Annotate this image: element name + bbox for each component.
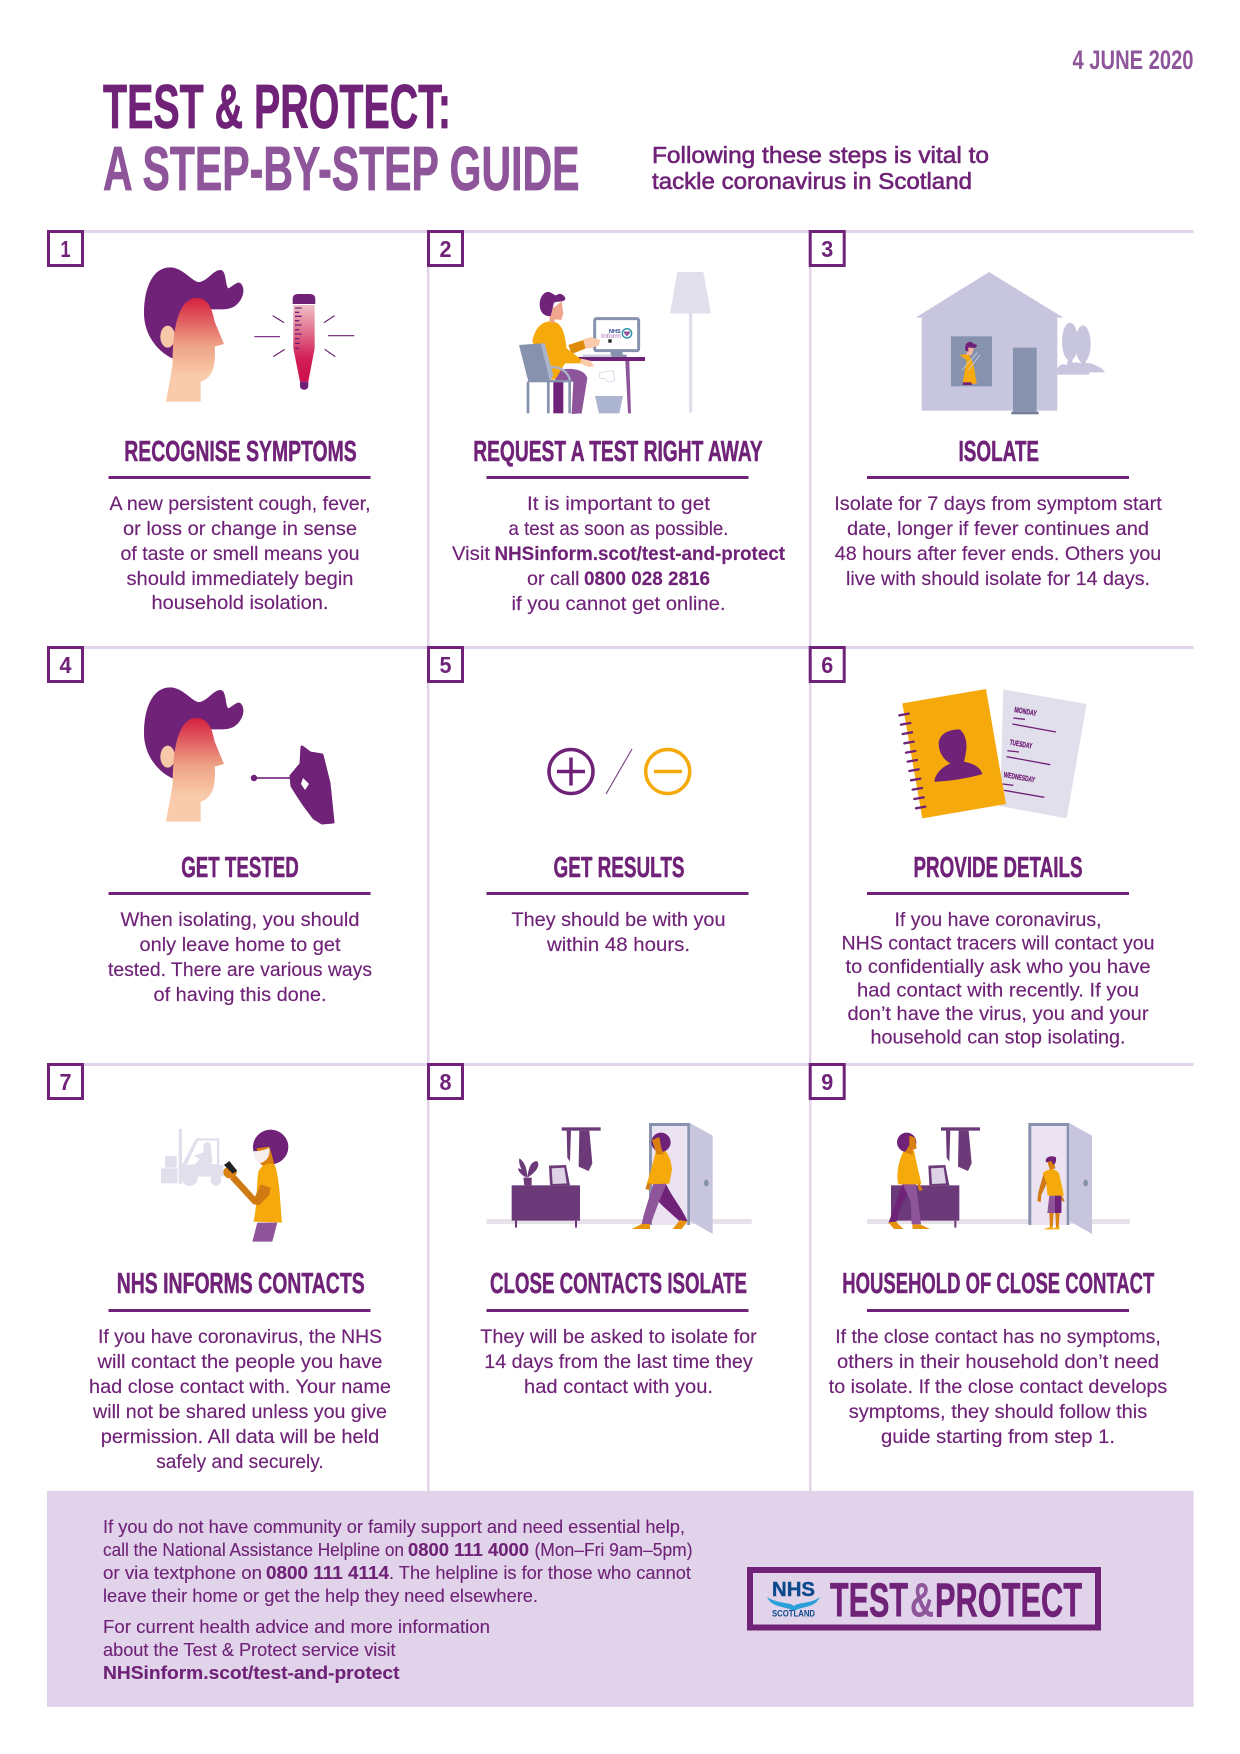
body text: if you cannot get online. bbox=[512, 593, 726, 615]
body text: had contact with recently. If you bbox=[857, 980, 1139, 1002]
panel: step 2 request a test bbox=[428, 232, 785, 615]
icon: household member and child at door bbox=[867, 1123, 1130, 1234]
body text: others in their household don’t need bbox=[837, 1351, 1159, 1373]
body text: symptoms, they should follow this bbox=[849, 1401, 1148, 1423]
panel: step 7 NHS informs contacts bbox=[48, 1064, 391, 1473]
body text: to isolate. If the close contact develops bbox=[829, 1376, 1167, 1398]
logo: NHS Scotland Test & Protect: TEST bbox=[830, 1574, 908, 1628]
body text: 14 days from the last time they bbox=[484, 1351, 753, 1373]
logo: NHS Scotland Test & Protect bbox=[750, 1570, 1098, 1628]
icon: person at computer with lamp: Inform bbox=[601, 333, 621, 340]
body text: only leave home to get bbox=[140, 934, 341, 956]
heading: NHS INFORMS CONTACTS bbox=[117, 1268, 365, 1300]
body text bbox=[829, 1326, 1167, 1448]
body text: Isolate for 7 days from symptom start bbox=[834, 493, 1162, 515]
number badge 2: 2 bbox=[440, 236, 452, 262]
icon: notebook and diary page: TUESDAY bbox=[1009, 738, 1033, 751]
further information text: NHSinform.scot/test-and-protect bbox=[103, 1663, 400, 1683]
body text: They will be asked to isolate for bbox=[480, 1326, 757, 1348]
heading: PROVIDE DETAILS bbox=[914, 852, 1082, 884]
icon: head with thermometer bbox=[144, 267, 354, 402]
heading: GET TESTED bbox=[181, 852, 299, 884]
number badge 3 bbox=[810, 232, 844, 266]
body text: will contact the people you have bbox=[96, 1351, 383, 1373]
body text: of having this done. bbox=[154, 984, 326, 1006]
number badge 5: 5 bbox=[440, 652, 452, 678]
icon: notebook and diary page bbox=[899, 689, 1087, 818]
helpline text bbox=[103, 1517, 692, 1606]
body text: If you have coronavirus, the NHS bbox=[98, 1326, 382, 1348]
body text: A new persistent cough, fever, bbox=[110, 493, 370, 515]
body text: should immediately begin bbox=[126, 568, 354, 590]
number badge 9: 9 bbox=[821, 1069, 833, 1095]
body text: 0800 028 2816 bbox=[584, 568, 710, 590]
body text bbox=[110, 493, 370, 614]
panel: step 1 recognise symptoms bbox=[48, 232, 370, 614]
number badge 7 bbox=[48, 1064, 82, 1098]
icon: person at computer with lamp bbox=[519, 272, 711, 414]
body text: They should be with you bbox=[512, 909, 726, 931]
body text bbox=[842, 909, 1154, 1048]
date: 4 JUNE 2020 bbox=[1072, 45, 1194, 75]
body text: of taste or smell means you bbox=[120, 543, 360, 565]
helpline text: . The helpline is for those who cannot bbox=[389, 1563, 691, 1583]
icon: contact tracer with phone and forklift bbox=[161, 1129, 288, 1242]
body text: NHS contact tracers will contact you bbox=[842, 932, 1154, 954]
number badge 6: 6 bbox=[821, 652, 833, 678]
icon: house with person at window bbox=[916, 272, 1105, 414]
logo: NHS Scotland Test & Protect: & bbox=[910, 1574, 934, 1628]
panel: step 3 isolate bbox=[810, 232, 1162, 590]
body text: household isolation. bbox=[152, 592, 328, 614]
body text: 48 hours after fever ends. Others you bbox=[835, 543, 1161, 565]
subtitle: tackle coronavirus in Scotland bbox=[652, 168, 972, 194]
body text: or loss or change in sense bbox=[123, 518, 357, 540]
number badge 1: 1 bbox=[60, 236, 71, 262]
icon: head and hand with swab bbox=[144, 687, 333, 823]
further information text: For current health advice and more information bbox=[103, 1617, 490, 1637]
panel: step 5 get results bbox=[428, 648, 748, 956]
body text: NHSinform.scot/test-and-protect bbox=[494, 543, 785, 565]
body text bbox=[89, 1326, 391, 1473]
number badge 9 bbox=[810, 1064, 844, 1098]
heading: REQUEST A TEST RIGHT AWAY bbox=[473, 436, 763, 468]
body text: Visit bbox=[452, 543, 491, 565]
helpline text: If you do not have community or family support and need essential help, bbox=[103, 1517, 685, 1537]
icon: notebook and diary page: WEDNESDAY bbox=[1003, 770, 1036, 784]
further information text: about the Test & Protect service visit bbox=[103, 1640, 396, 1660]
body text: live with should isolate for 14 days. bbox=[846, 568, 1150, 590]
panel: helpline footer bbox=[47, 1491, 1194, 1707]
body text bbox=[834, 493, 1162, 590]
body text: permission. All data will be held bbox=[101, 1426, 379, 1448]
body text: will not be shared unless you give bbox=[92, 1401, 387, 1423]
body text: guide starting from step 1. bbox=[881, 1426, 1115, 1448]
heading: CLOSE CONTACTS ISOLATE bbox=[490, 1268, 747, 1300]
panel: step 9 household of close contact bbox=[810, 1064, 1167, 1448]
body text bbox=[512, 909, 726, 956]
number badge 1 bbox=[48, 232, 82, 266]
number badge 8 bbox=[428, 1064, 462, 1098]
body text bbox=[452, 493, 785, 615]
heading: RECOGNISE SYMPTOMS bbox=[124, 436, 357, 468]
body text: tested. There are various ways bbox=[108, 959, 372, 981]
logo: NHS Scotland Test & Protect: PROTECT bbox=[935, 1574, 1082, 1628]
body text: don’t have the virus, you and your bbox=[848, 1003, 1149, 1025]
title bbox=[103, 73, 580, 204]
helpline text: (Mon–Fri 9am–5pm) bbox=[534, 1540, 692, 1560]
body text: When isolating, you should bbox=[120, 909, 360, 931]
body text: to confidentially ask who you have bbox=[846, 956, 1150, 978]
body text: a test as soon as possible. bbox=[508, 518, 728, 540]
helpline text: or via textphone on bbox=[103, 1563, 262, 1583]
panel: step 4 get tested bbox=[48, 648, 372, 1006]
icon: person at computer with lamp: NHS bbox=[609, 329, 621, 335]
heading: ISOLATE bbox=[959, 436, 1039, 468]
helpline text: 0800 111 4000 bbox=[408, 1540, 529, 1560]
body text: or call bbox=[527, 568, 580, 590]
body text: household can stop isolating. bbox=[870, 1026, 1126, 1048]
body text: had contact with you. bbox=[524, 1376, 713, 1398]
title: TEST & PROTECT: bbox=[103, 73, 451, 142]
body text: It is important to get bbox=[527, 493, 711, 515]
helpline text: call the National Assistance Helpline on bbox=[103, 1540, 404, 1560]
subtitle: Following these steps is vital to bbox=[652, 142, 989, 168]
icon: positive and negative symbols bbox=[549, 749, 690, 794]
body text: safely and securely. bbox=[156, 1451, 324, 1473]
body text: had close contact with. Your name bbox=[89, 1376, 391, 1398]
body text: If you have coronavirus, bbox=[894, 909, 1102, 931]
icon: notebook and diary page: MONDAY bbox=[1014, 705, 1038, 718]
number badge 3: 3 bbox=[821, 236, 833, 262]
heading: GET RESULTS bbox=[554, 852, 684, 884]
icon: person leaving through door bbox=[487, 1123, 752, 1234]
body text: date, longer if fever continues and bbox=[847, 518, 1149, 540]
number badge 2 bbox=[428, 232, 462, 266]
body text bbox=[480, 1326, 757, 1398]
number badge 5 bbox=[428, 648, 462, 682]
panel: step 8 close contacts isolate bbox=[428, 1064, 757, 1398]
logo: NHS Scotland Test & Protect: SCOTLAND bbox=[772, 1608, 815, 1618]
body text: If the close contact has no symptoms, bbox=[835, 1326, 1161, 1348]
title: A STEP-BY-STEP GUIDE bbox=[103, 135, 580, 204]
helpline text: 0800 111 4114 bbox=[266, 1563, 389, 1583]
number badge 8: 8 bbox=[440, 1069, 452, 1095]
panel: step 6 provide details bbox=[810, 648, 1154, 1048]
helpline text: leave their home or get the help they need elsewhere. bbox=[103, 1586, 538, 1606]
number badge 4 bbox=[48, 648, 82, 682]
number badge 4: 4 bbox=[60, 652, 72, 678]
further information text bbox=[103, 1617, 490, 1683]
logo: NHS Scotland Test & Protect: NHS bbox=[772, 1579, 815, 1601]
body text: within 48 hours. bbox=[546, 934, 690, 956]
number badge 6 bbox=[810, 648, 844, 682]
number badge 7: 7 bbox=[60, 1069, 72, 1095]
subtitle bbox=[652, 142, 989, 194]
body text bbox=[108, 909, 372, 1006]
